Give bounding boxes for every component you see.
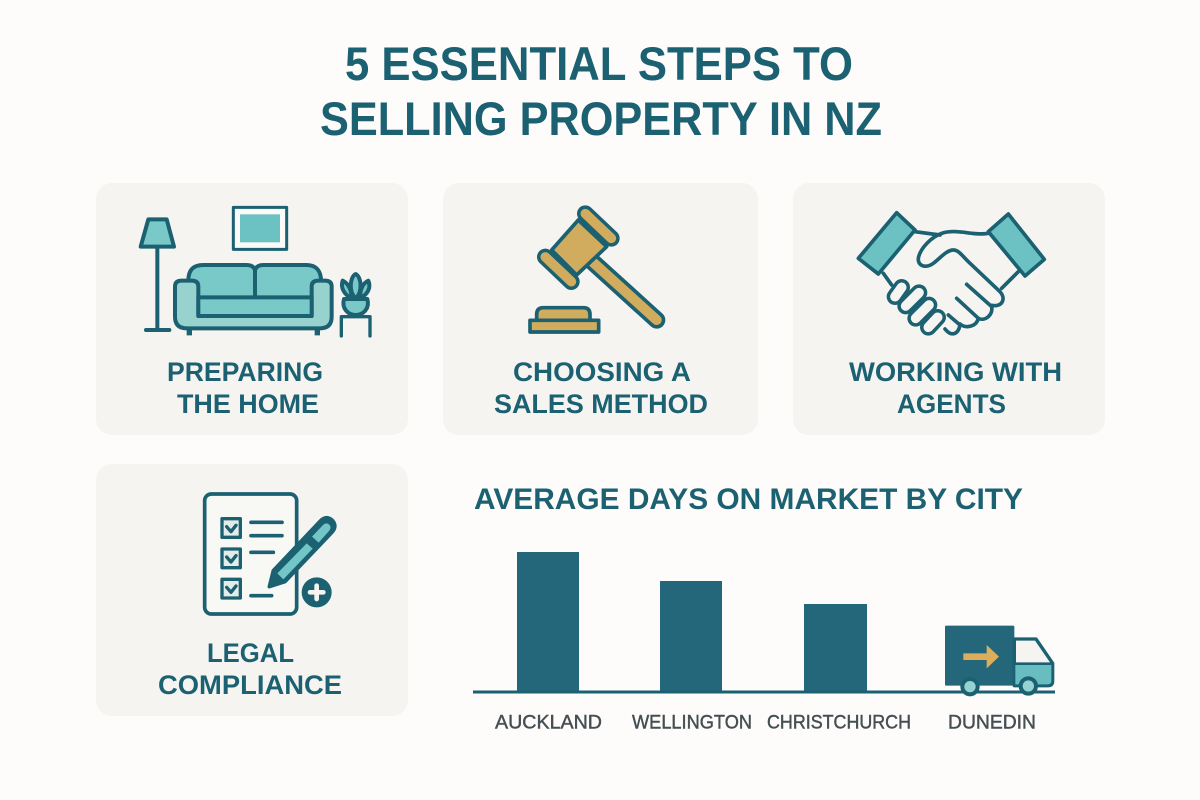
title: SELLING PROPERTY IN NZ (320, 92, 882, 145)
heading: legal compliance: LEGAL (207, 638, 294, 668)
icon: handshake (858, 213, 1044, 334)
city labels: WELLINGTON (632, 712, 752, 734)
chart heading: AVERAGE DAYS ON MARKET BY CITY (474, 483, 1023, 516)
city labels: DUNEDIN (948, 712, 1036, 734)
heading: preparing the home: PREPARING (167, 357, 323, 387)
heading: legal compliance (158, 638, 342, 700)
heading: choosing a sales method (494, 357, 708, 419)
heading: preparing the home: THE HOME (177, 389, 319, 419)
title (320, 37, 882, 145)
heading: legal compliance: COMPLIANCE (158, 670, 342, 700)
heading: working with agents: AGENTS (897, 389, 1006, 419)
heading: working with agents (849, 357, 1062, 419)
panel: working with agents (793, 183, 1105, 435)
city labels: AUCKLAND (495, 712, 602, 734)
bar: Wellington (660, 581, 722, 692)
heading: choosing a sales method: SALES METHOD (494, 389, 708, 419)
panel: preparing the home (96, 183, 408, 435)
icon: gavel (530, 214, 657, 332)
panel: choosing a sales method (443, 183, 758, 435)
heading: working with agents: WORKING WITH (849, 357, 1062, 387)
icon: living room (141, 207, 370, 336)
chart baseline (473, 690, 1055, 694)
icon: checklist with pen (205, 494, 335, 614)
bar chart: average days on market by city (473, 483, 1055, 734)
panel: legal compliance (96, 464, 408, 716)
heading: choosing a sales method: CHOOSING A (513, 357, 691, 387)
city labels (495, 712, 1036, 734)
title: 5 ESSENTIAL STEPS TO (345, 37, 853, 90)
icon: delivery truck (945, 626, 1053, 694)
bar: Christchurch (804, 604, 867, 692)
city labels: CHRISTCHURCH (767, 712, 911, 734)
heading: preparing the home (167, 357, 323, 419)
bar: Auckland (517, 552, 579, 692)
